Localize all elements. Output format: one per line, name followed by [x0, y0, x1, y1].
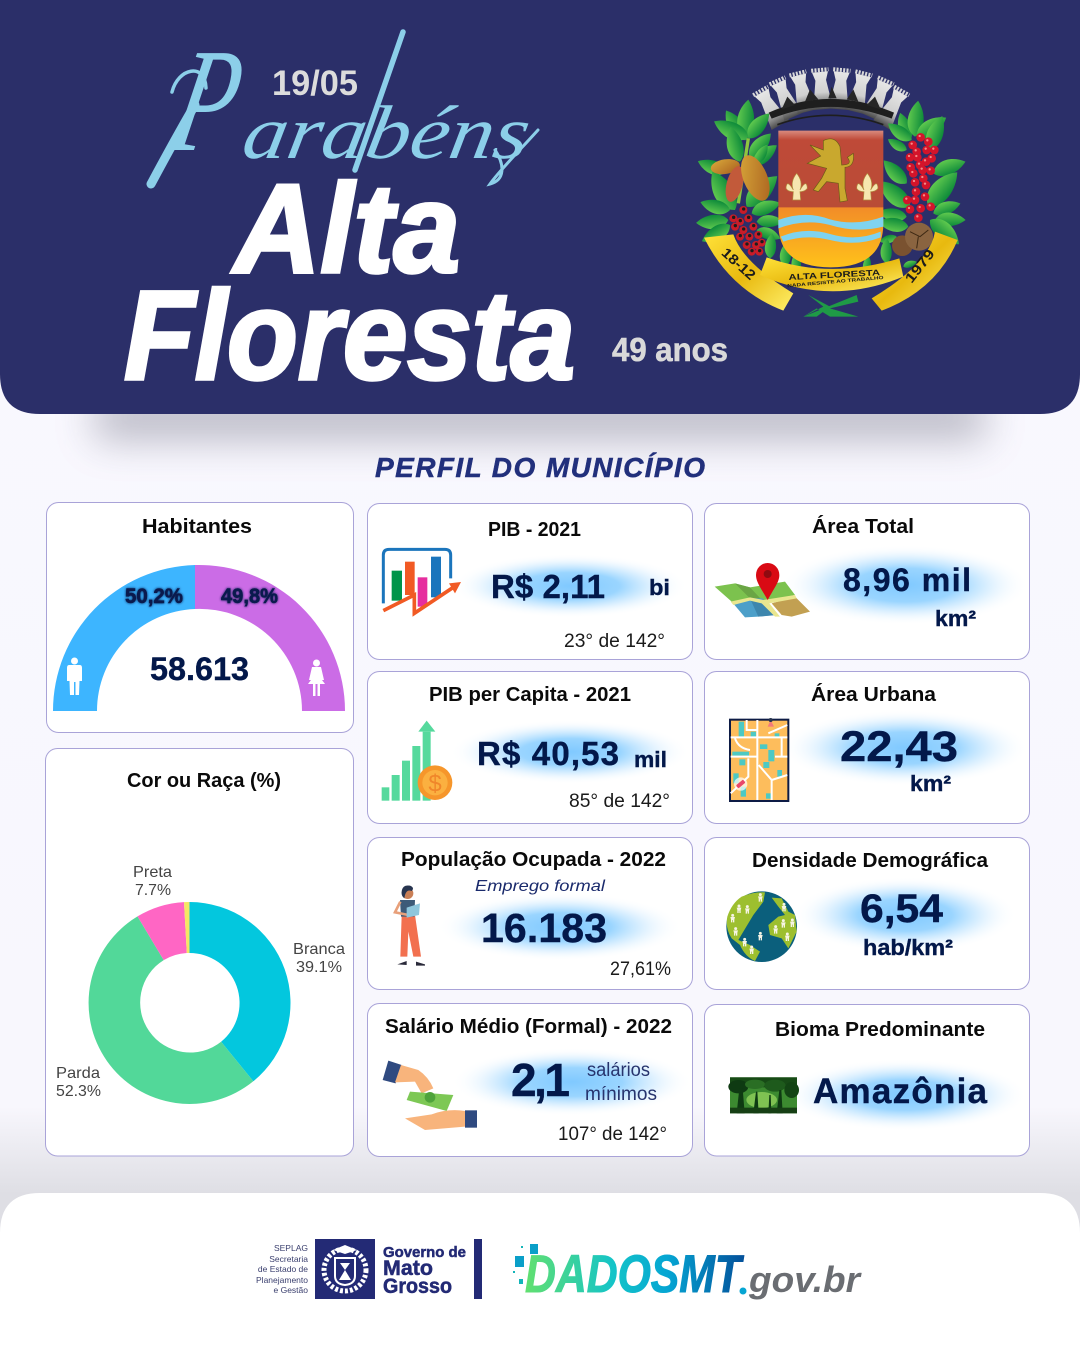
panel: Área Total: km² [935, 606, 976, 631]
icon: growth chart with coin: $ [428, 771, 442, 798]
panel: Cor ou Raça: Parda [56, 1065, 100, 1082]
panel: Cor ou Raça [46, 748, 354, 1156]
panel: Habitantes [46, 502, 354, 732]
panel: Cor ou Raça: Cor ou Raça (%) [127, 770, 281, 792]
panel: Salário Médio: salários [587, 1060, 650, 1081]
section heading: PERFIL DO MUNICÍPIO [375, 452, 705, 483]
ribbon: 18-12 [719, 244, 759, 283]
panel: Cor ou Raça: Branca [293, 941, 345, 958]
panel: Densidade Demográfica: hab/km² [863, 935, 953, 960]
logo: Governo de Mato Grosso: de Estado de [258, 1264, 308, 1274]
icon: woman [308, 660, 325, 696]
logo: Governo de Mato Grosso: Grosso [383, 1275, 452, 1298]
ribbon: 1979 [901, 246, 938, 286]
panel: Área Urbana: Área Urbana [811, 683, 937, 706]
ribbon stems [803, 295, 858, 317]
anniversary: 49 anos [612, 331, 728, 368]
gauge chart: 58.613 [150, 651, 249, 687]
crown [752, 69, 910, 130]
date: 19/05 [272, 64, 358, 103]
city name [124, 158, 575, 406]
panel: Habitantes: Habitantes [142, 516, 252, 538]
cacao [710, 151, 775, 205]
icon: coat of arms of Alta Floresta [695, 69, 968, 317]
lion [807, 139, 854, 202]
icon: globe with people [726, 891, 797, 962]
panel: Área Total: Área Total [812, 515, 914, 538]
city name: Alta [231, 158, 460, 299]
panel: PIB per Capita: PIB per Capita - 2021 [429, 684, 631, 706]
logo: Governo de Mato Grosso: SEPLAG [274, 1243, 308, 1253]
panel: PIB: 23° de 142° [564, 631, 665, 652]
panel: Bioma Predominante: Amazônia [813, 1072, 988, 1111]
panel: Salário Médio: Salário Médio (Formal) - 2022 [385, 1016, 672, 1038]
logo: Governo de Mato Grosso: Governo de [383, 1244, 466, 1261]
panel: Área Total [704, 504, 1030, 660]
donut chart [89, 902, 291, 1104]
panel: PIB per Capita: 85° de 142° [569, 791, 670, 812]
panel: Bioma Predominante: Bioma Predominante [775, 1019, 985, 1041]
logo: DadosMT.gov.br: gov.br [748, 1259, 862, 1300]
gauge chart: 49,8% [221, 585, 278, 608]
panel: PIB per Capita [368, 672, 692, 824]
header shadow [95, 395, 985, 440]
panel: PIB [368, 504, 692, 660]
logo: DadosMT.gov.br: DADOSMT [525, 1245, 745, 1304]
panel: Salário Médio: 2,1 [511, 1054, 570, 1106]
panel: População Ocupada: 27,61% [610, 959, 671, 980]
gauge chart [53, 565, 345, 711]
logo: Governo de Mato Grosso: Secretaria [269, 1254, 308, 1264]
panel: Cor ou Raça: 52.3% [56, 1083, 101, 1100]
panel: Densidade Demográfica: Densidade Demográfica [752, 850, 989, 872]
footer [0, 1193, 1080, 1350]
logo: Governo de Mato Grosso: Planejamento [256, 1275, 308, 1285]
script heading: Parabéns: arabéns [237, 91, 537, 175]
panel: Salário Médio: 107° de 142° [558, 1124, 667, 1145]
icon: woman with book [395, 885, 425, 966]
logo: Governo de Mato Grosso [256, 1239, 482, 1299]
guarana berries [729, 206, 766, 256]
icon: chart with arrow [383, 549, 461, 613]
coffee berries [903, 133, 939, 222]
gauge chart: 50,2% [125, 585, 183, 608]
icon: hands exchanging money [383, 1061, 477, 1130]
panel: Salário Médio [368, 1004, 692, 1156]
ribbon [704, 232, 958, 311]
panel: Densidade Demográfica: 6,54 [860, 887, 944, 931]
gauge chart: 50,2% [125, 585, 183, 608]
panel: Área Urbana: 22,43 [840, 723, 958, 771]
panel: PIB per Capita: mil [634, 747, 667, 772]
panel: PIB per Capita: R$ 40,53 [477, 735, 619, 772]
panel: Área Urbana [704, 672, 1030, 824]
shield [778, 131, 883, 267]
panel: Densidade Demográfica [704, 838, 1030, 990]
panel: População Ocupada: População Ocupada - 2022 [401, 849, 666, 871]
header banner [0, 0, 1080, 414]
nuts [892, 223, 933, 256]
panel: Área Urbana: km² [910, 771, 951, 796]
script heading: Parabéns [151, 19, 538, 184]
ribbon: NADA RESISTE AO TRABALHO [787, 275, 884, 288]
panel: Salário Médio: mínimos [585, 1084, 657, 1105]
panel: Bioma Predominante [704, 1004, 1030, 1156]
gauge chart: 49,8% [221, 585, 278, 608]
panel: Área Total: 8,96 mil [843, 562, 971, 598]
panel: PIB: bi [649, 575, 670, 600]
ribbon: ALTA FLORESTA [788, 267, 880, 282]
panel: Cor ou Raça: 7.7% [135, 882, 171, 899]
icon: man [67, 658, 82, 695]
fleur-de-lis right [857, 173, 878, 200]
panel: População Ocupada [368, 838, 692, 990]
panel: Cor ou Raça: 39.1% [296, 959, 342, 976]
emblem [324, 1245, 366, 1291]
fleur-de-lis left [786, 173, 807, 200]
panel: Cor ou Raça: Preta [133, 864, 172, 881]
icon: city map [730, 718, 788, 801]
laurel leaves [695, 99, 968, 274]
city name: Floresta [124, 265, 575, 406]
panel: PIB: PIB - 2021 [488, 519, 581, 541]
panel: PIB: R$ 2,11 [491, 568, 605, 605]
icon: forest [728, 1077, 799, 1113]
icon: map with pin [715, 563, 810, 617]
panel: População Ocupada: 16.183 [481, 905, 607, 951]
script heading: Parabéns: P [158, 19, 256, 183]
logo: Governo de Mato Grosso: e Gestão [274, 1285, 308, 1295]
panel: População Ocupada: Emprego formal [475, 878, 605, 895]
logo: Governo de Mato Grosso: Mato [383, 1257, 433, 1280]
icon: growth chart with coin [382, 721, 452, 801]
